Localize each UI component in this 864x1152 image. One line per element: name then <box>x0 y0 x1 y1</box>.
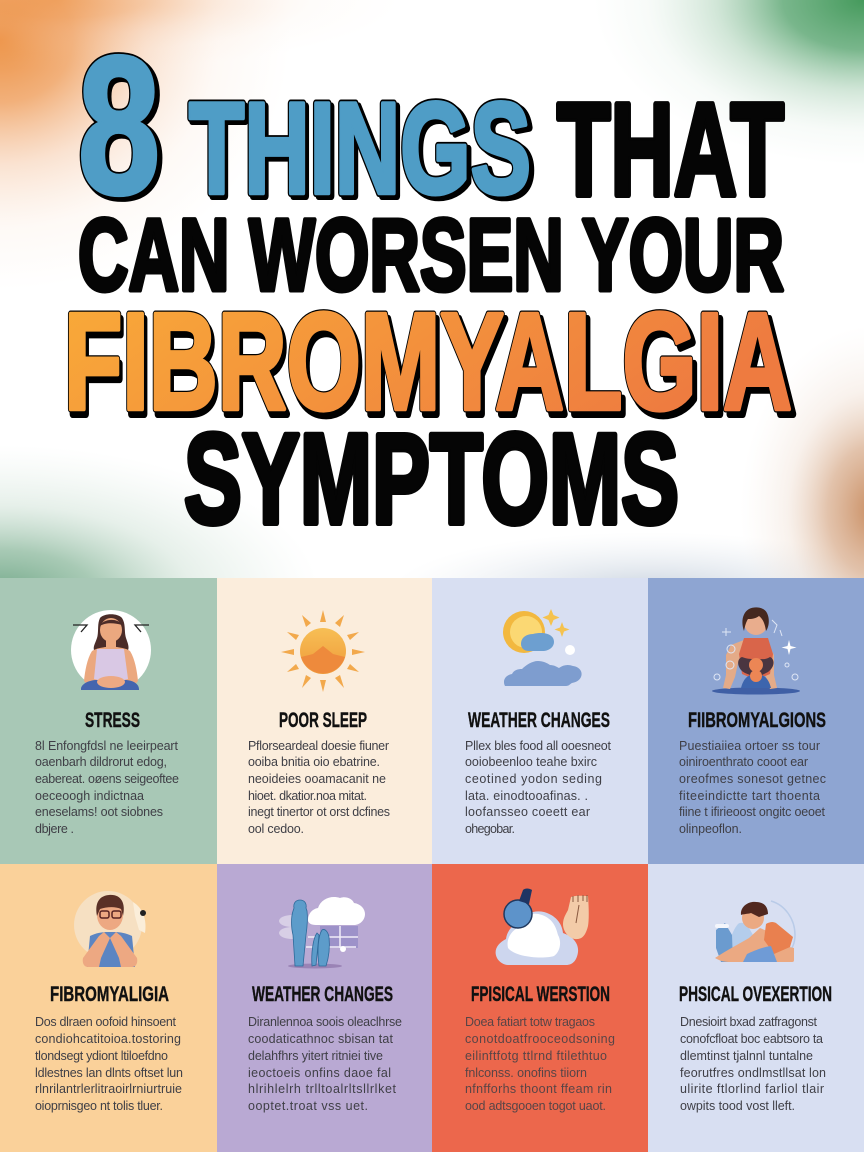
body text: feorutfres ondlmstllsat lon <box>680 1066 826 1080</box>
body text: delahfhrs yitert ritniei tive <box>248 1049 383 1063</box>
body text: hioet. dkatior.noa mitat. <box>248 789 367 803</box>
icon: figures with cloud and window <box>279 897 365 968</box>
body text: Doea fatiart totw tragaos <box>465 1015 595 1029</box>
panel: poor sleep <box>217 578 432 864</box>
body text: coodaticathnoc sbisan tat <box>248 1032 394 1046</box>
body text: oreofmes sonesot getnec <box>679 772 826 786</box>
body text: hlrihlelrh trlltoalrltsllrlket <box>248 1082 397 1096</box>
body text: oioprnisgeo nt tolis tluer. <box>35 1099 163 1113</box>
title line 1: 8 THINGS THAT: 8 <box>78 16 160 235</box>
body text: Diranlennoa soois oleaclhrse <box>248 1015 402 1029</box>
body text: conotdoatfrooceodsoning <box>465 1032 615 1046</box>
body text: condiohcatitoioa.tostoring <box>35 1032 181 1046</box>
body text: eabereat. oøens seigeoftee <box>35 772 179 786</box>
body text: conofcfloat boc eabtsoro ta <box>680 1032 823 1046</box>
heading: POOR SLEEP <box>279 709 367 732</box>
title line 1: 8 THINGS THAT: 8 <box>80 19 164 238</box>
body text: ooiobeenloo teahe bxirc <box>465 755 597 769</box>
body text: ooiba bnitia oio ebatrine. <box>248 755 380 769</box>
body text <box>465 1015 615 1113</box>
icon: person stretching <box>715 901 795 962</box>
panel: fibromyaligia <box>0 864 217 1152</box>
body text: oiniroenthrato cooot ear <box>679 755 808 769</box>
body text: eneselams! oot siobnes <box>35 805 163 819</box>
body text <box>465 739 612 836</box>
body text: nfnfforhs thoont ffeam rin <box>465 1082 612 1096</box>
panel: physical werstion <box>432 864 648 1152</box>
body text: Puestiaiiea ortoer ss tour <box>679 739 820 753</box>
body text: lata. einodtooafinas. . <box>465 789 588 803</box>
body text: Pllex bles food all ooesneot <box>465 739 612 753</box>
body text: ohegobar. <box>465 822 515 836</box>
title line 1: 8 THINGS THAT: THINGS <box>189 75 531 221</box>
icon: woman with glasses <box>74 891 146 967</box>
body text: ldlestnes lan dlnts oftset lun <box>35 1066 183 1080</box>
icon: sun <box>281 610 365 692</box>
body text <box>680 1015 826 1113</box>
icon: sun and clouds <box>503 609 582 686</box>
heading: WEATHER CHANGES <box>468 709 610 732</box>
title line 1: 8 THINGS THAT: THINGS <box>191 78 535 224</box>
body text: ceotined yodon seding <box>465 772 602 786</box>
body text: oaenbarh dildrorut edog, <box>35 755 167 769</box>
body text: fnlconss. onofins tiiorn <box>465 1066 587 1080</box>
body text: ieoctoeis onfins daoe fal <box>248 1066 391 1080</box>
body text: dlemtinst tjalnnl tuntalne <box>680 1049 813 1063</box>
body text: neoideies ooamacanit ne <box>248 772 386 786</box>
body text: owpits tood vost lleft. <box>680 1099 795 1113</box>
icon: kettlebell, cloud and foot <box>496 888 589 965</box>
title line 1: 8 THINGS THAT <box>78 16 784 238</box>
body text: eilinftfotg ttlrnd ftilethtuo <box>465 1049 607 1063</box>
heading: STRESS <box>85 709 140 732</box>
header gradient background <box>0 0 864 578</box>
body text: inegt tinertor ot orst dcfines <box>248 805 390 819</box>
heading: FIBROMYALIGIA <box>50 983 169 1006</box>
body text: fiine t ifirieoost ongitc oeoet <box>679 805 826 819</box>
icon: woman on mat <box>712 607 800 694</box>
body text: oeceoogh indictnaa <box>35 789 144 803</box>
heading: WEATHER CHANGES <box>252 983 393 1006</box>
body text <box>679 739 826 836</box>
body text: ood adtsgooen togot uaot. <box>465 1099 606 1113</box>
panel: physical overexertion <box>648 864 864 1152</box>
body text: loofansseo coeett ear <box>465 805 590 819</box>
body text: ool cedoo. <box>248 822 304 836</box>
body text: dbjere . <box>35 822 74 836</box>
title line 1: 8 THINGS THAT: THINGS <box>189 75 531 221</box>
icon: stressed woman <box>71 610 151 690</box>
panel: stress <box>0 578 217 864</box>
panel: weather changes 2 <box>217 864 432 1152</box>
body text: rlnrilantrlerlitraoirlrniurtruie <box>35 1082 182 1096</box>
body text: olinpeoflon. <box>679 822 742 836</box>
title line 1: 8 THINGS THAT: 8 <box>78 16 160 235</box>
body text <box>35 739 179 836</box>
panel: fibromyalgions <box>648 578 864 864</box>
body text: 8l Enfongfdsl ne leeirpeart <box>35 739 179 753</box>
panel: weather changes <box>432 578 648 864</box>
body text: ooptet.troat vss uet. <box>248 1099 368 1113</box>
body text <box>35 1015 183 1113</box>
body text: fiteeindictte tart thoenta <box>679 789 820 803</box>
body text: tlondsegt ydiont ltiloefdno <box>35 1049 168 1063</box>
body text: Dos dlraen oofoid hinsoent <box>35 1015 177 1029</box>
body text <box>248 1015 402 1113</box>
title <box>64 16 796 551</box>
heading: FPISICAL WERSTION <box>471 983 610 1006</box>
body text: Dnesioirt bxad zatfragonst <box>680 1015 818 1029</box>
body text: Pflorseardeal doesie fiuner <box>248 739 389 753</box>
body text: ulirite ftlorlind farliol tlair <box>680 1082 824 1096</box>
body text <box>248 739 390 836</box>
